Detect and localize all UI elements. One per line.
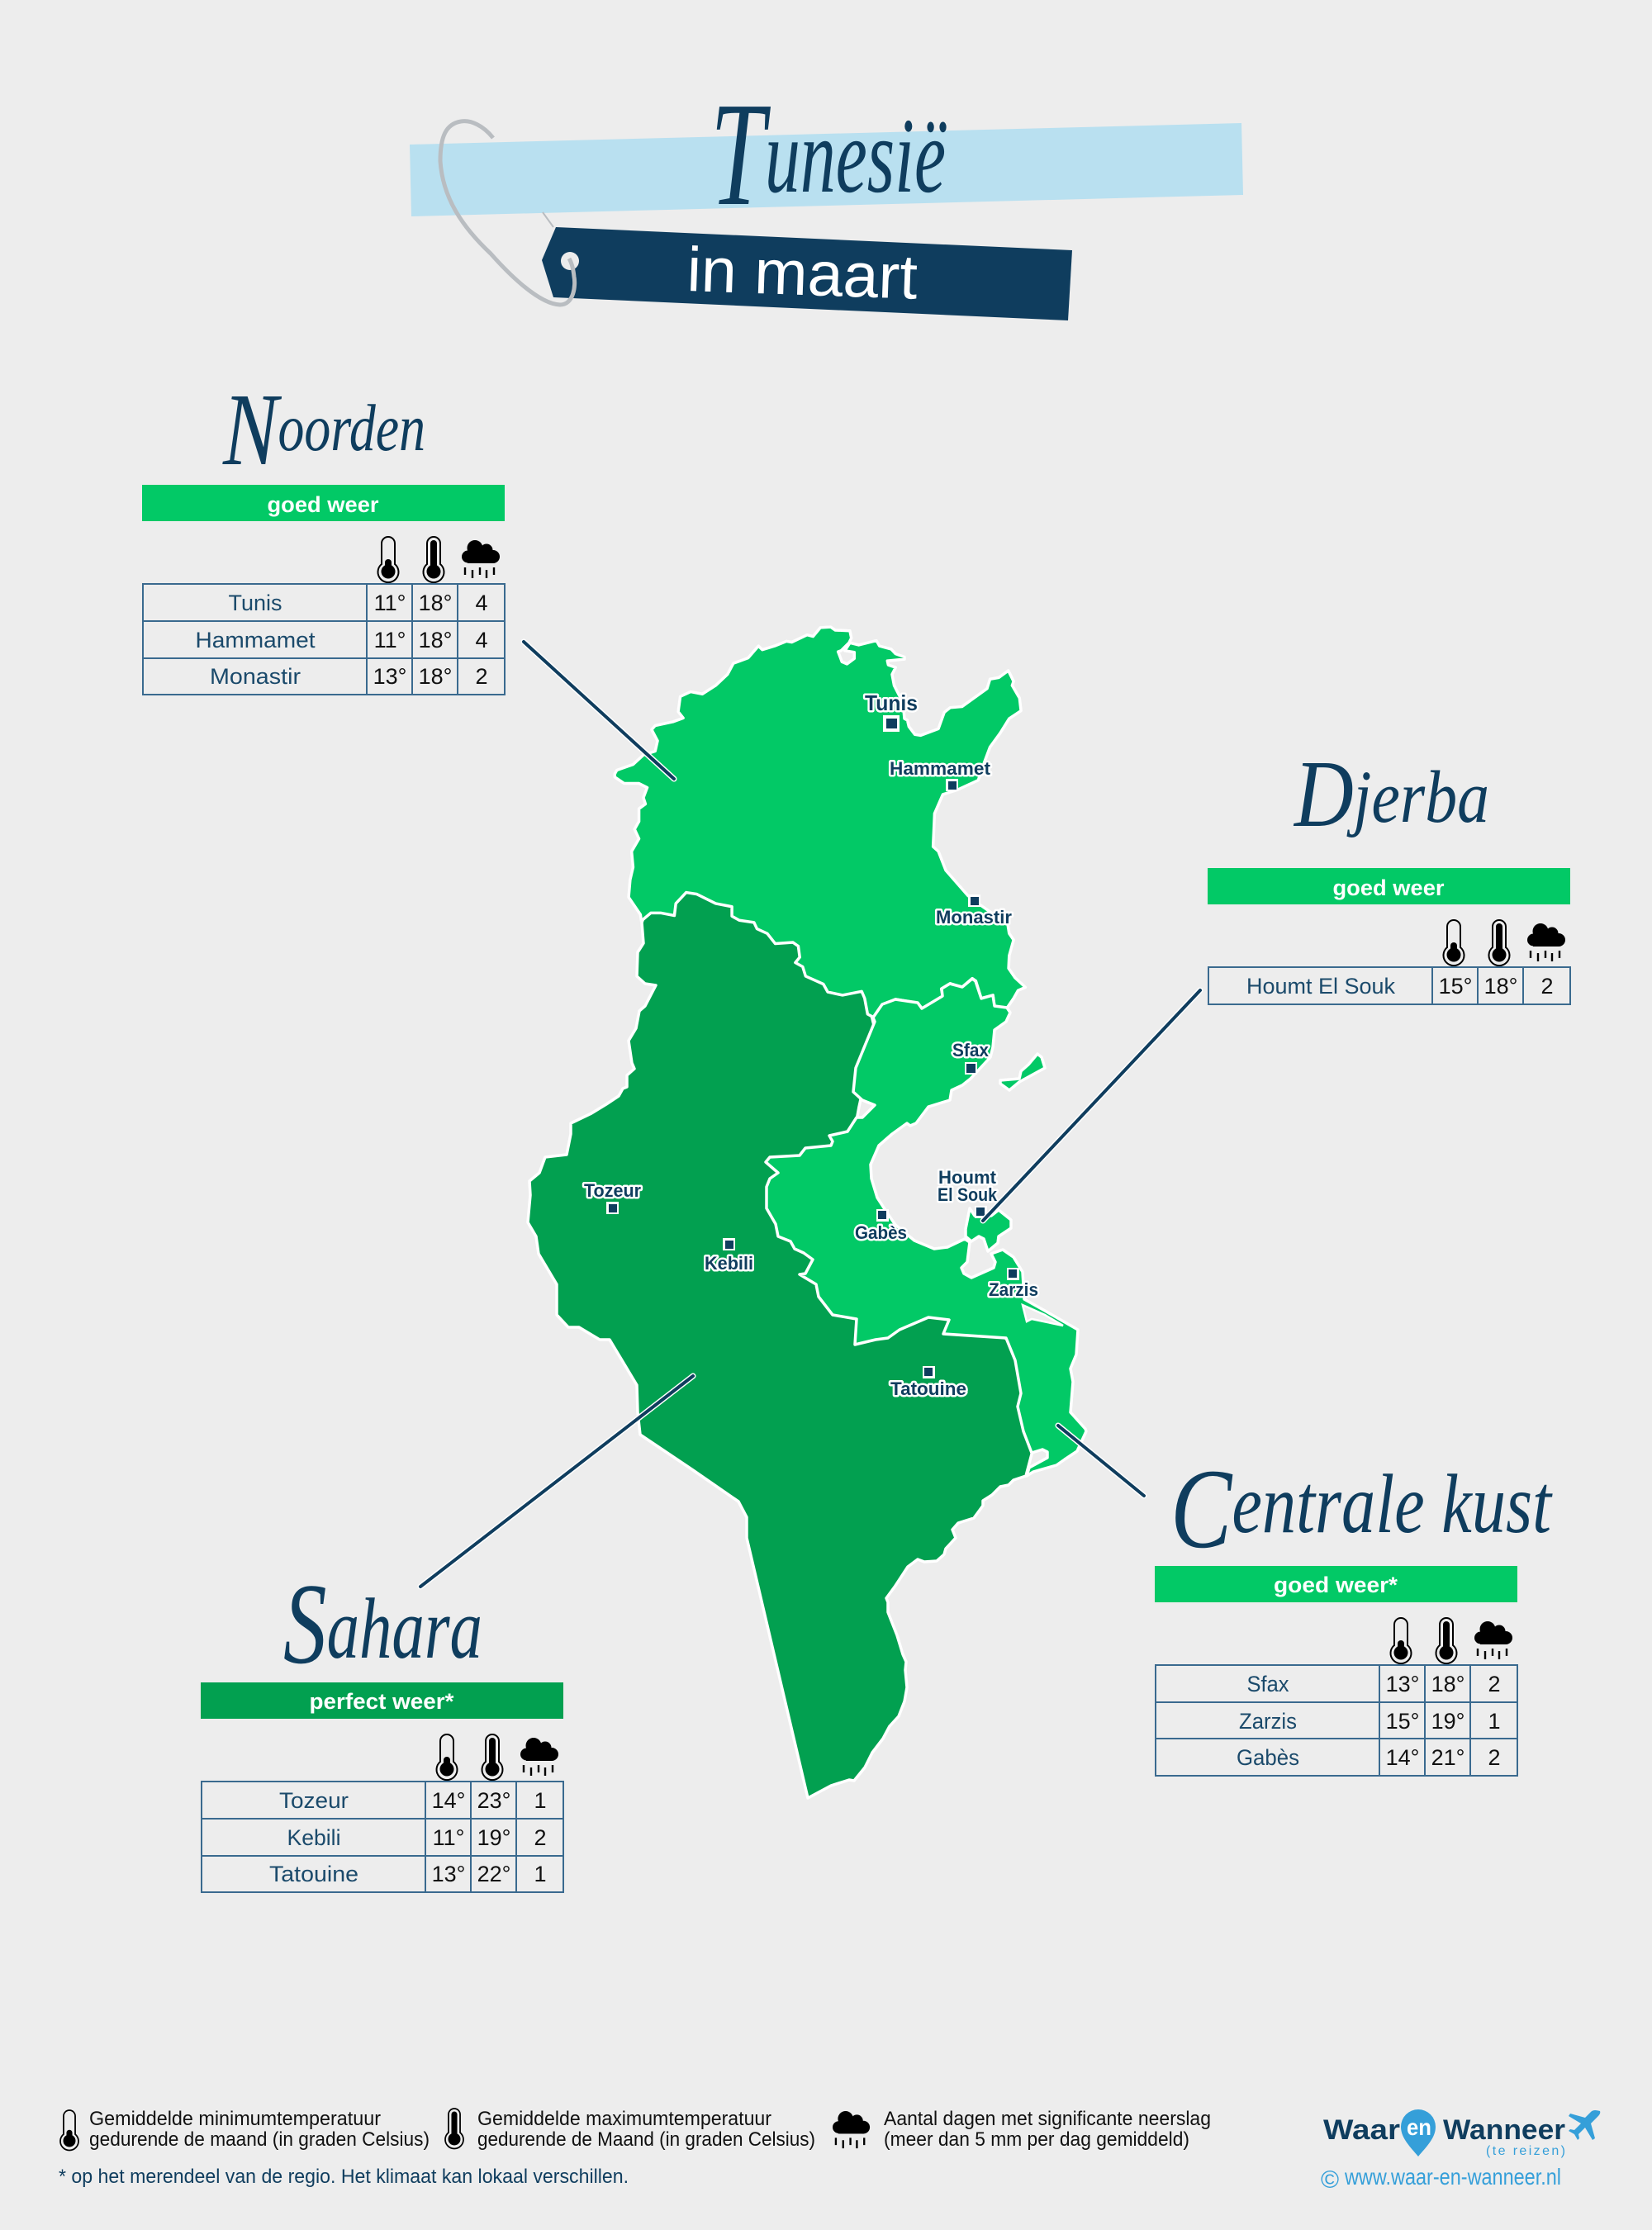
climate table: 18° bbox=[419, 664, 452, 689]
logo: Waar en Wanneer bbox=[1321, 2109, 1600, 2194]
icon: min temperature bbox=[1391, 1618, 1411, 1663]
icon: rain bbox=[1527, 923, 1565, 961]
city marker: Tatouine bbox=[923, 1366, 935, 1378]
city label: Tunis: Tunis bbox=[865, 690, 918, 715]
climate table: 4 bbox=[475, 628, 488, 652]
climate table: Tunis bbox=[228, 591, 282, 615]
icon: legend min temperature bbox=[60, 2110, 78, 2150]
heading: Noorden: N bbox=[223, 373, 292, 487]
climate table: Sfax bbox=[1247, 1672, 1289, 1696]
heading: Centrale kust: C bbox=[1170, 1445, 1246, 1572]
climate table: 14° bbox=[1386, 1745, 1419, 1770]
climate table: Monastir bbox=[210, 664, 301, 689]
rating text: perfect weer* bbox=[309, 1689, 454, 1714]
panel: Sahara bbox=[201, 1560, 563, 1892]
climate table: 18° bbox=[419, 591, 452, 615]
heading: Sahara: ahara bbox=[327, 1580, 482, 1677]
icon: min temperature bbox=[378, 537, 398, 582]
climate table bbox=[143, 584, 505, 695]
logo word: Waar: Waar bbox=[1323, 2114, 1400, 2146]
climate table: Kebili bbox=[287, 1825, 340, 1850]
heading: Sahara: S bbox=[283, 1560, 341, 1688]
rating text: goed weer* bbox=[1274, 1573, 1398, 1597]
heading: Djerba: jerba bbox=[1346, 757, 1489, 838]
icon: min temperature bbox=[1444, 920, 1464, 966]
region: Centrale kust bbox=[766, 979, 1086, 1476]
city marker: Kebili bbox=[723, 1238, 735, 1250]
climate table bbox=[1156, 1665, 1517, 1776]
legend text: min temperature bbox=[89, 2108, 430, 2151]
climate table: 2 bbox=[475, 664, 488, 689]
climate table: 13° bbox=[432, 1862, 465, 1886]
climate table: 1 bbox=[534, 1788, 547, 1813]
climate table: Houmt El Souk bbox=[1246, 974, 1395, 999]
icon: max temperature bbox=[482, 1734, 502, 1780]
rating text: goed weer bbox=[1333, 875, 1445, 900]
title: Tunesië: T bbox=[710, 72, 793, 236]
icon: min temperature bbox=[436, 1734, 458, 1780]
logo pin bbox=[1401, 2109, 1436, 2156]
region: Sahara bbox=[528, 826, 1045, 1798]
climate table: Gabès bbox=[1237, 1745, 1299, 1770]
tag string bbox=[543, 212, 553, 227]
rating bar bbox=[1208, 868, 1570, 904]
connector: Centrale kust bbox=[1058, 1426, 1144, 1496]
city marker: Tozeur bbox=[606, 1202, 619, 1214]
climate table: 18° bbox=[1484, 974, 1517, 999]
climate table: Zarzis bbox=[1239, 1709, 1297, 1734]
icon: max temperature bbox=[423, 537, 444, 582]
tag ring bbox=[440, 121, 575, 305]
climate table: 13° bbox=[1386, 1672, 1419, 1696]
city marker: Houmt El Souk bbox=[975, 1206, 987, 1218]
city label: Tozeur: Tozeur bbox=[584, 1180, 641, 1201]
climate table: 2 bbox=[1488, 1745, 1501, 1770]
rating bar bbox=[142, 485, 505, 521]
panel: Noorden bbox=[142, 373, 505, 695]
legend text: min temperature: Gemiddelde minimumtemperatuur bbox=[89, 2108, 381, 2130]
legend text: rain: Aantal dagen met significante neerslag bbox=[884, 2108, 1211, 2130]
copyright and website bbox=[1321, 2164, 1561, 2194]
city marker: Monastir bbox=[968, 894, 980, 907]
tag hole bbox=[561, 252, 579, 270]
legend text: min temperature: gedurende de maand (in graden Celsius) bbox=[89, 2128, 430, 2151]
legend text: max temperature bbox=[477, 2108, 815, 2151]
city label: Houmt El Souk: El Souk bbox=[938, 1184, 998, 1205]
city label: Houmt El Souk: Houmt bbox=[938, 1167, 997, 1188]
island: Kerkennah bbox=[1000, 1054, 1045, 1090]
icon: max temperature bbox=[1436, 1618, 1457, 1663]
connector: Noorden bbox=[524, 642, 674, 779]
legend text: max temperature: gedurende de Maand (in graden Celsius) bbox=[477, 2128, 815, 2151]
legend text: max temperature: Gemiddelde maximumtemperatuur bbox=[477, 2108, 771, 2130]
city marker: Tunis bbox=[883, 715, 900, 732]
connector: Djerba bbox=[983, 990, 1200, 1221]
copyright and website: www.waar-en-wanneer.nl bbox=[1344, 2164, 1561, 2190]
city label: Tatouine: Tatouine bbox=[890, 1378, 966, 1399]
city label: Hammamet: Hammamet bbox=[890, 758, 991, 779]
icon: legend rain bbox=[833, 2111, 870, 2148]
map of Tunisia bbox=[528, 627, 1086, 1798]
climate table: 2 bbox=[1540, 974, 1554, 999]
icon: rain bbox=[1474, 1621, 1512, 1659]
legend text: rain bbox=[884, 2108, 1211, 2151]
city label: Monastir: Monastir bbox=[936, 907, 1012, 928]
heading: Noorden: oorden bbox=[278, 392, 425, 465]
region: Noorden bbox=[615, 627, 1025, 1018]
climate table: 11° bbox=[374, 628, 406, 652]
climate table bbox=[202, 1782, 563, 1892]
title: Tunesië: unesië bbox=[765, 97, 947, 216]
city marker: Sfax bbox=[965, 1062, 977, 1075]
climate table: 2 bbox=[1488, 1672, 1501, 1696]
climate table: 19° bbox=[1431, 1709, 1464, 1734]
climate table: 2 bbox=[534, 1825, 547, 1850]
climate table: 1 bbox=[534, 1862, 547, 1886]
subtitle: in maart: in maart bbox=[686, 235, 919, 313]
title band bbox=[410, 123, 1243, 216]
icon: max temperature bbox=[1488, 920, 1510, 966]
logo word: Wanneer: Wanneer bbox=[1443, 2114, 1565, 2146]
heading: Djerba: D bbox=[1294, 742, 1363, 847]
climate table: 14° bbox=[432, 1788, 465, 1813]
panel: Djerba bbox=[1208, 742, 1570, 1004]
climate table: Hammamet bbox=[195, 628, 316, 652]
rating text: goed weer bbox=[268, 492, 379, 517]
city label: Sfax: Sfax bbox=[952, 1040, 990, 1060]
city marker: Gabès bbox=[876, 1209, 889, 1222]
city label: Zarzis: Zarzis bbox=[989, 1279, 1038, 1300]
climate table: 1 bbox=[1488, 1709, 1501, 1734]
icon: plane bbox=[1569, 2110, 1600, 2140]
climate table: 4 bbox=[475, 591, 488, 615]
logo tagline: (te reizen) bbox=[1486, 2144, 1565, 2158]
climate table: Tatouine bbox=[269, 1862, 358, 1886]
icon: rain bbox=[520, 1738, 558, 1776]
climate table: 22° bbox=[477, 1862, 510, 1886]
city label: Gabès: Gabès bbox=[855, 1222, 907, 1243]
icon: legend max temperature bbox=[445, 2109, 463, 2148]
title banner bbox=[410, 72, 1243, 320]
logo word: en: en bbox=[1407, 2114, 1431, 2140]
climate table: 21° bbox=[1431, 1745, 1464, 1770]
legend text: rain: (meer dan 5 mm per dag gemiddeld) bbox=[884, 2128, 1189, 2151]
climate table: Tozeur bbox=[279, 1788, 349, 1813]
climate table: 23° bbox=[477, 1788, 510, 1813]
climate table: 19° bbox=[477, 1825, 510, 1850]
city label: Kebili: Kebili bbox=[705, 1253, 753, 1274]
lagoon bbox=[1023, 1305, 1063, 1326]
icon: rain bbox=[462, 540, 500, 578]
copyright and website: © bbox=[1321, 2166, 1339, 2194]
city marker: Zarzis bbox=[1007, 1268, 1019, 1280]
climate table: 13° bbox=[373, 664, 406, 689]
climate table: 15° bbox=[1439, 974, 1472, 999]
legend bbox=[59, 2108, 1211, 2188]
island: Djerba bbox=[966, 1208, 1011, 1251]
connector: Sahara bbox=[420, 1376, 693, 1587]
climate table: 18° bbox=[419, 628, 452, 652]
climate table: 18° bbox=[1431, 1672, 1464, 1696]
panel: Centrale kust bbox=[1155, 1445, 1553, 1776]
rating bar bbox=[1155, 1566, 1517, 1602]
city label: Houmt El Souk bbox=[938, 1167, 998, 1205]
rating bar bbox=[201, 1682, 563, 1719]
tag: in maart bbox=[542, 227, 1072, 320]
climate table: 11° bbox=[374, 591, 406, 615]
climate table bbox=[1208, 967, 1570, 1004]
heading: Centrale kust: entrale kust bbox=[1232, 1458, 1553, 1551]
city marker: Hammamet bbox=[946, 779, 958, 791]
climate table: 15° bbox=[1386, 1709, 1419, 1734]
footnote: * op het merendeel van de regio. Het klimaat kan lokaal verschillen. bbox=[59, 2166, 629, 2188]
climate table: 11° bbox=[433, 1825, 464, 1850]
